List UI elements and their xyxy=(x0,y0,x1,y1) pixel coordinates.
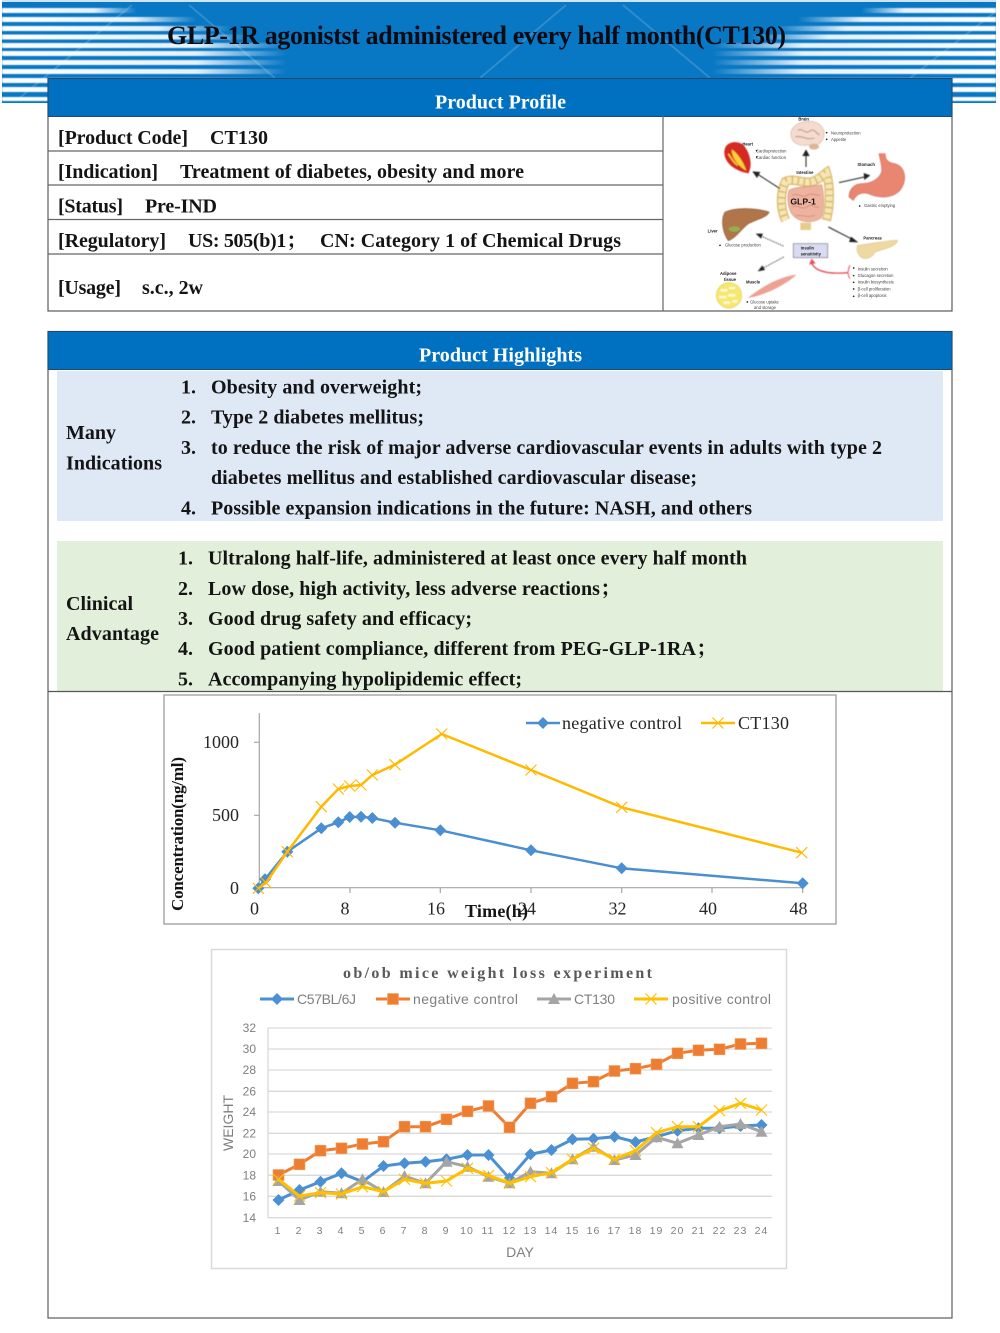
label: many indications: Many xyxy=(66,422,116,444)
illustration: GLP-1 organ effects xyxy=(708,116,905,310)
banner background xyxy=(2,0,996,103)
x axis labels: 18 xyxy=(629,1225,642,1237)
organ labels: Glucose production xyxy=(725,242,761,247)
muscle xyxy=(748,275,797,298)
row: usage: s.c., 2w xyxy=(142,277,204,299)
row: usage xyxy=(58,277,204,299)
x axis labels: 20 xyxy=(671,1225,684,1237)
organ labels: Insulin secretion xyxy=(858,266,888,271)
profile header: Product Profile xyxy=(435,92,566,114)
organ labels: Pancreas xyxy=(863,235,883,240)
y axis labels: 26 xyxy=(243,1084,256,1098)
y axis labels: 0 xyxy=(230,878,239,898)
list: indications: to reduce the risk of major adverse cardiovascular events in adults with type 2 xyxy=(211,437,882,459)
panel: product highlights xyxy=(48,332,952,1318)
x axis labels: 2 xyxy=(296,1225,302,1237)
x axis labels: 4 xyxy=(338,1225,344,1237)
list: clinical advantages: 2. xyxy=(178,578,193,600)
label: clinical advantage xyxy=(66,593,159,645)
y axis labels: 32 xyxy=(243,1021,256,1035)
organ labels: and storage xyxy=(754,305,777,310)
organ labels: Heart xyxy=(742,141,754,146)
x axis title: Time(h) xyxy=(465,901,528,922)
row: usage: [Usage] xyxy=(58,277,121,299)
x axis labels: 8 xyxy=(422,1225,428,1237)
series: CT130 xyxy=(278,1124,762,1200)
chart: concentration over time xyxy=(164,695,836,924)
x axis labels: 5 xyxy=(359,1225,365,1237)
legend xyxy=(526,713,789,733)
y axis labels: 28 xyxy=(243,1063,256,1077)
brain xyxy=(791,121,824,145)
row: regulatory xyxy=(58,230,621,252)
list: clinical advantages: Accompanying hypolipidemic effect; xyxy=(208,668,522,690)
stomach xyxy=(849,154,905,200)
organ labels: Stomach xyxy=(857,162,875,167)
intestine: small bowel xyxy=(788,185,824,222)
organ labels: tissue xyxy=(724,277,737,282)
organ labels: Insulin biosynthesis xyxy=(858,280,894,285)
x axis labels: 0 xyxy=(250,898,259,918)
panel: product profile xyxy=(48,78,952,311)
x axis labels: 17 xyxy=(608,1225,621,1237)
heart xyxy=(724,142,751,173)
y axis labels: 1000 xyxy=(203,732,239,752)
list: indications: Possible expansion indications in the future: NASH, and others xyxy=(211,498,752,520)
organ labels: Muscle xyxy=(746,279,761,284)
organ labels: Adipose xyxy=(720,271,737,276)
title: GLP-1R agonistst administered every half month(CT130) xyxy=(167,21,786,50)
organ labels: Glucagon secretion xyxy=(858,273,894,278)
row: status: Pre-IND xyxy=(145,196,217,218)
organ labels: Insulin xyxy=(801,246,815,251)
legend: C57BL/6J xyxy=(297,991,356,1007)
organ labels: Brain xyxy=(798,116,809,121)
x axis labels: 7 xyxy=(401,1225,407,1237)
y axis labels xyxy=(243,1021,256,1225)
y axis labels: 16 xyxy=(243,1190,256,1204)
organ labels: Cardiac function xyxy=(756,155,787,160)
legend: CT130 xyxy=(738,713,789,733)
legend: CT130 xyxy=(574,991,615,1007)
block: clinical advantage xyxy=(57,541,943,691)
legend xyxy=(260,991,771,1007)
block: many indications xyxy=(57,371,943,521)
pancreas xyxy=(857,240,898,258)
x axis labels: 10 xyxy=(460,1225,474,1237)
list: indications: 4. xyxy=(181,498,196,520)
row: product code: CT130 xyxy=(210,127,268,149)
list: clinical advantages: Low dose, high activity, less adverse reactions； xyxy=(208,578,620,600)
organ labels: Intestine xyxy=(796,170,814,175)
x axis labels: 32 xyxy=(608,898,626,918)
liver xyxy=(723,209,769,241)
list: clinical advantages: Ultralong half-life, administered at least once every half month xyxy=(208,548,747,570)
x axis labels: 12 xyxy=(503,1225,516,1237)
insulin sensitivity box xyxy=(793,244,828,258)
x axis labels: 14 xyxy=(545,1225,558,1237)
intestine: colon xyxy=(781,173,829,220)
label: many indications xyxy=(66,422,162,474)
x axis labels: 6 xyxy=(380,1225,386,1237)
row: product code: [Product Code] xyxy=(58,127,188,149)
x axis labels: 21 xyxy=(692,1225,705,1237)
x axis labels: 40 xyxy=(699,898,717,918)
series: negative control xyxy=(278,1043,762,1175)
y axis labels: 14 xyxy=(243,1211,256,1225)
organ labels: GLP-1 xyxy=(790,196,816,206)
x axis title: DAY xyxy=(506,1244,535,1260)
x axis labels xyxy=(275,1225,768,1237)
x axis labels xyxy=(250,898,808,918)
row: product code xyxy=(58,127,268,149)
x axis labels: 11 xyxy=(482,1225,494,1237)
organ labels: Appetite xyxy=(831,137,847,142)
y axis labels: 24 xyxy=(243,1105,256,1119)
organ labels: Glucose uptake xyxy=(750,300,780,305)
x axis labels: 48 xyxy=(790,898,808,918)
x axis labels: 3 xyxy=(317,1225,323,1237)
row: regulatory: CN: Category 1 of Chemical Drugs xyxy=(320,230,621,252)
x axis labels: 22 xyxy=(713,1225,726,1237)
list: indications: diabetes mellitus and established cardiovascular disease; xyxy=(211,467,697,489)
x axis labels: 16 xyxy=(427,898,445,918)
list: indications: Obesity and overweight; xyxy=(211,376,422,398)
organ labels: Cardioprotection xyxy=(756,149,787,154)
x axis labels: 9 xyxy=(443,1225,449,1237)
label: clinical advantage: Clinical xyxy=(66,593,133,615)
highlights header: Product Highlights xyxy=(419,344,582,366)
series: CT130 xyxy=(258,734,802,888)
row: indication: Treatment of diabetes, obesity and more xyxy=(180,161,524,183)
organ labels: Liver xyxy=(708,228,718,233)
row: indication: [Indication] xyxy=(58,161,158,183)
legend: negative control xyxy=(562,713,682,733)
list: indications: Type 2 diabetes mellitus; xyxy=(211,406,424,428)
x axis labels: 15 xyxy=(566,1225,579,1237)
x axis labels: 1 xyxy=(275,1225,281,1237)
y axis labels: 18 xyxy=(243,1168,256,1182)
label: many indications: Indications xyxy=(66,452,162,474)
y axis title: Concentration(ng/ml) xyxy=(168,757,187,911)
label: clinical advantage: Advantage xyxy=(66,623,159,645)
list: indications: 1. xyxy=(181,376,196,398)
list: clinical advantages: 4. xyxy=(178,638,193,660)
y axis labels: 22 xyxy=(243,1126,256,1140)
list: indications: 3. xyxy=(181,437,196,459)
chart: ob/ob mice weight loss xyxy=(212,950,786,1268)
arrows xyxy=(752,149,870,271)
series: C57BL/6J xyxy=(278,1125,762,1200)
x axis labels: 24 xyxy=(518,898,536,918)
adipose tissue xyxy=(716,283,742,308)
profile header xyxy=(48,78,952,116)
list: clinical advantages: Good drug safety and efficacy; xyxy=(208,608,472,630)
x axis labels: 16 xyxy=(587,1225,600,1237)
y axis labels: 500 xyxy=(212,805,239,825)
list: clinical advantages xyxy=(178,548,747,690)
chart title: ob/ob mice weight loss experiment xyxy=(343,965,653,982)
x axis labels: 13 xyxy=(524,1225,537,1237)
list: clinical advantages: 1. xyxy=(178,548,193,570)
x axis labels: 8 xyxy=(340,898,350,918)
list: clinical advantages: 3. xyxy=(178,608,193,630)
y axis labels: 30 xyxy=(243,1042,256,1056)
organ labels: sensitivity xyxy=(801,251,822,256)
x axis labels: 23 xyxy=(734,1225,747,1237)
y axis labels: 20 xyxy=(243,1147,256,1161)
list: indications: 2. xyxy=(181,406,196,428)
series: negative control xyxy=(258,817,803,888)
legend: negative control xyxy=(413,991,518,1007)
organ labels: β-cell proliferation xyxy=(858,286,891,291)
y axis title: WEIGHT xyxy=(220,1095,236,1151)
x axis labels: 24 xyxy=(755,1225,768,1237)
organ labels: Gastric emptying xyxy=(864,203,896,208)
y axis labels xyxy=(203,732,239,898)
x axis labels: 19 xyxy=(650,1225,663,1237)
legend: positive control xyxy=(672,991,771,1007)
list: indications xyxy=(181,376,882,520)
highlights header xyxy=(48,332,952,370)
organ labels: β-cell apoptosis xyxy=(858,293,887,298)
list: clinical advantages: Good patient compliance, different from PEG-GLP-1RA； xyxy=(208,638,716,660)
series: positive control xyxy=(278,1103,762,1196)
organ labels: Neuroprotection xyxy=(831,131,861,136)
organ labels xyxy=(708,116,896,310)
row: regulatory: [Regulatory] xyxy=(58,230,166,252)
list: clinical advantages: 5. xyxy=(178,668,193,690)
row: regulatory: US: 505(b)1； xyxy=(188,230,306,252)
row: status: [Status] xyxy=(58,196,123,218)
row: status xyxy=(58,196,217,218)
